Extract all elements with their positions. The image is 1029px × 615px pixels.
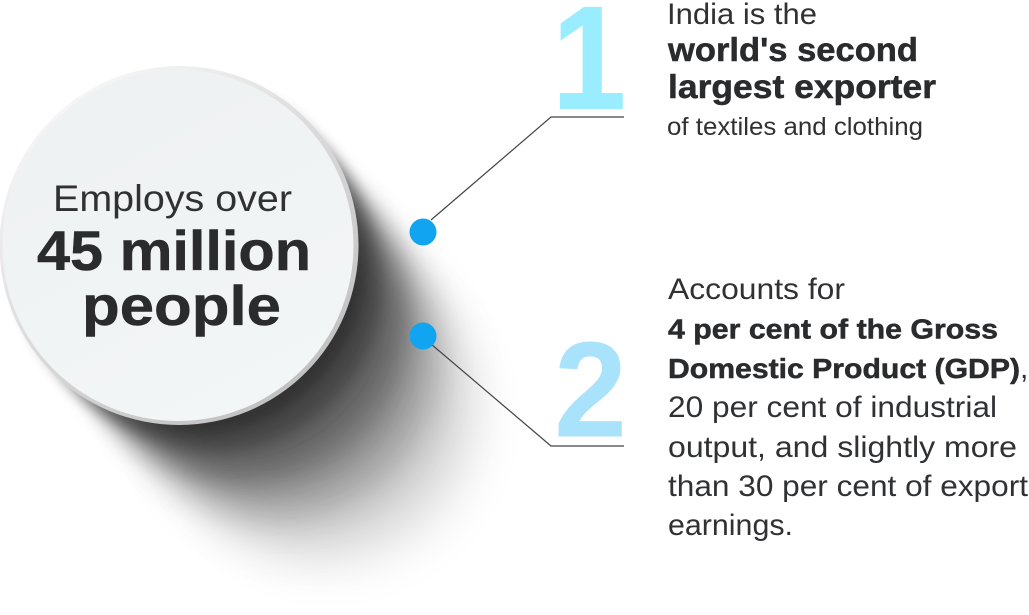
text block 1 <box>667 0 936 141</box>
text block 2: Domestic Product (GDP) <box>668 353 1020 384</box>
text block 2: 20 per cent of industrial <box>668 391 997 424</box>
number 2: 2 <box>554 314 627 466</box>
circle text: 45 million <box>37 219 311 282</box>
text block 2: 4 per cent of the Gross <box>668 314 998 344</box>
circle text <box>37 178 311 337</box>
text block 1: largest exporter <box>668 68 936 105</box>
dot 2 <box>410 322 436 350</box>
dot 1 <box>410 218 436 246</box>
text block 1: world's second <box>667 31 918 68</box>
text block 2: Accounts for <box>668 273 845 306</box>
text block 2: than 30 per cent of export <box>668 470 1029 503</box>
text block 2: output, and slightly more <box>668 431 1017 464</box>
connector line 1 <box>431 117 624 220</box>
connector line 2 <box>431 344 624 446</box>
circle text: people <box>82 274 281 337</box>
text block 1: of textiles and clothing <box>667 113 923 141</box>
long drop shadow <box>15 83 482 568</box>
circle panel <box>0 66 358 425</box>
text block 2: , <box>1020 352 1028 385</box>
text block 2 <box>668 273 1029 542</box>
circle text: Employs over <box>53 178 292 219</box>
text block 2: earnings. <box>668 509 793 542</box>
